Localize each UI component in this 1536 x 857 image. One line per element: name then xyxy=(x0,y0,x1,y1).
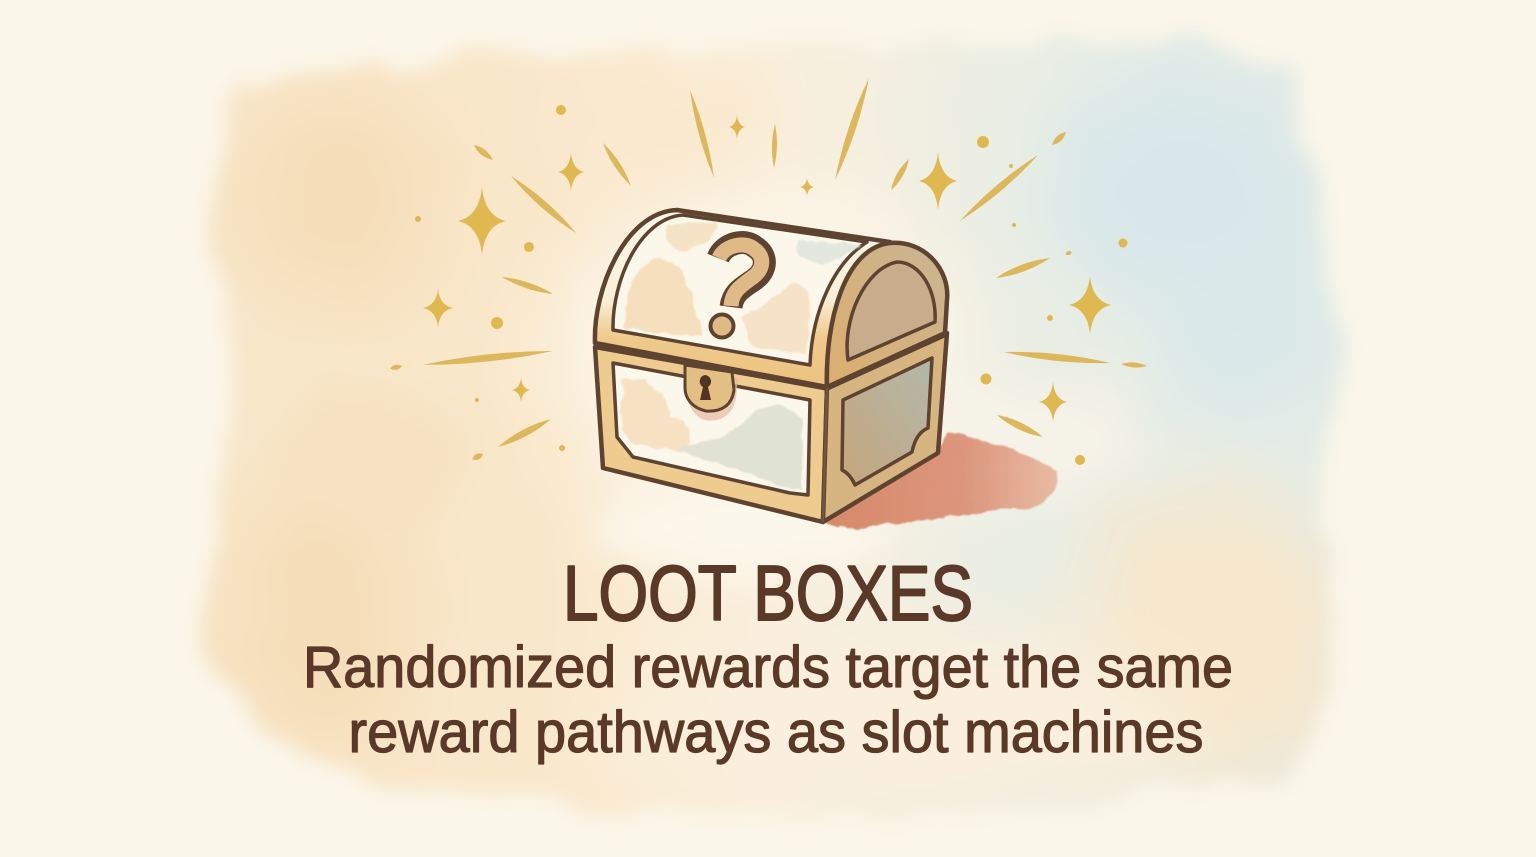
treasure chest illustration xyxy=(595,210,947,522)
chest corner edge xyxy=(823,388,827,522)
chest lid front xyxy=(595,210,890,387)
lock plate xyxy=(685,365,738,421)
title: LOOT BOXES xyxy=(563,549,973,637)
chest front panel xyxy=(613,363,810,495)
lid seam xyxy=(595,334,946,388)
chest dome panel xyxy=(847,262,935,360)
chest lid dome side xyxy=(827,243,947,387)
chest body side xyxy=(823,333,947,522)
question mark xyxy=(710,243,764,338)
chest body front xyxy=(595,347,827,522)
subtitle xyxy=(303,635,1233,765)
keyhole xyxy=(700,375,711,400)
chest shadow xyxy=(823,432,1057,529)
golden stars and dots xyxy=(415,105,1128,465)
subtitle: reward pathways as slot machines xyxy=(348,700,1204,765)
chest side panel xyxy=(842,358,932,485)
subtitle: Randomized rewards target the same xyxy=(303,635,1233,700)
watercolor wash background xyxy=(205,40,1350,822)
golden sparkle rays xyxy=(390,77,1147,462)
